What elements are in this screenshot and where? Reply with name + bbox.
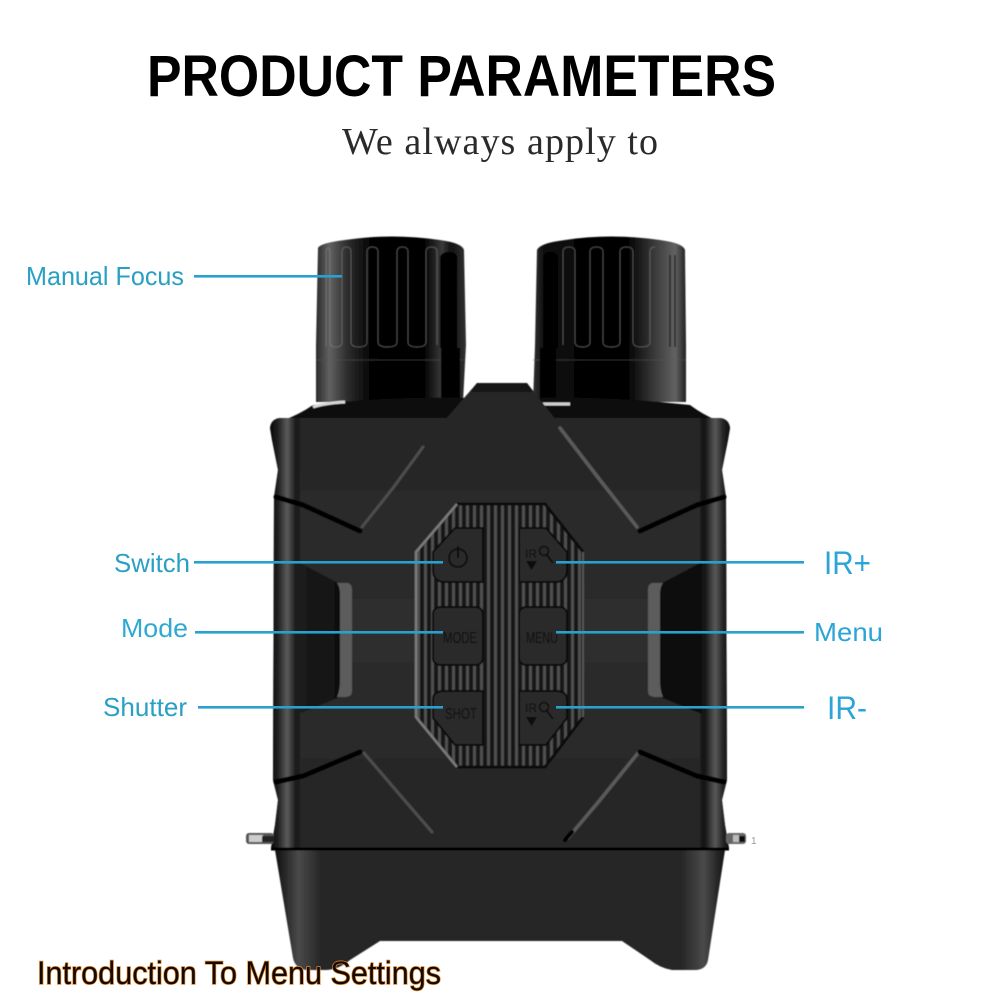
button: mode: MODE [443, 630, 477, 647]
callout: Shutter: Shutter [103, 692, 187, 722]
button: IR minus [519, 691, 567, 745]
callout: Mode: Mode [121, 613, 188, 643]
control panel [416, 504, 583, 767]
top center plate [370, 383, 633, 560]
left side band [270, 418, 300, 848]
right focus knob [533, 236, 686, 402]
right side band [700, 418, 730, 848]
body chamfer lines [276, 428, 724, 840]
button: power [433, 528, 483, 582]
right mounting lug [726, 833, 746, 844]
device: night vision binoculars [246, 236, 746, 970]
body [270, 418, 730, 848]
button: shot: SHOT [445, 706, 477, 723]
callout: IR-: IR- [827, 690, 867, 726]
callout: IR+: IR+ [824, 545, 871, 581]
title: PRODUCT PARAMETERS [147, 44, 776, 109]
button: mode [433, 607, 483, 665]
subtitle: We always apply to [342, 121, 658, 163]
battery base [275, 850, 725, 970]
button: shot [433, 691, 483, 745]
button: menu: MENU [526, 630, 558, 647]
right side recess [648, 562, 702, 714]
left mounting lug [246, 833, 274, 844]
footer heading: Introduction To Menu Settings [37, 955, 441, 991]
base seam [271, 848, 729, 850]
callout: Manual Focus: Manual Focus [26, 261, 184, 291]
button: IR plus [519, 528, 567, 582]
button: IR plus: IR [525, 547, 537, 561]
button: IR minus: IR [525, 701, 537, 715]
callout: Menu: Menu [814, 617, 883, 647]
left side recess [298, 562, 352, 714]
button: menu [519, 607, 567, 665]
left focus knob [316, 236, 466, 402]
callout: Switch: Switch [114, 548, 190, 578]
top plate bevel [471, 383, 533, 392]
stray mark: 1 [751, 836, 757, 847]
knob collars [284, 398, 716, 420]
